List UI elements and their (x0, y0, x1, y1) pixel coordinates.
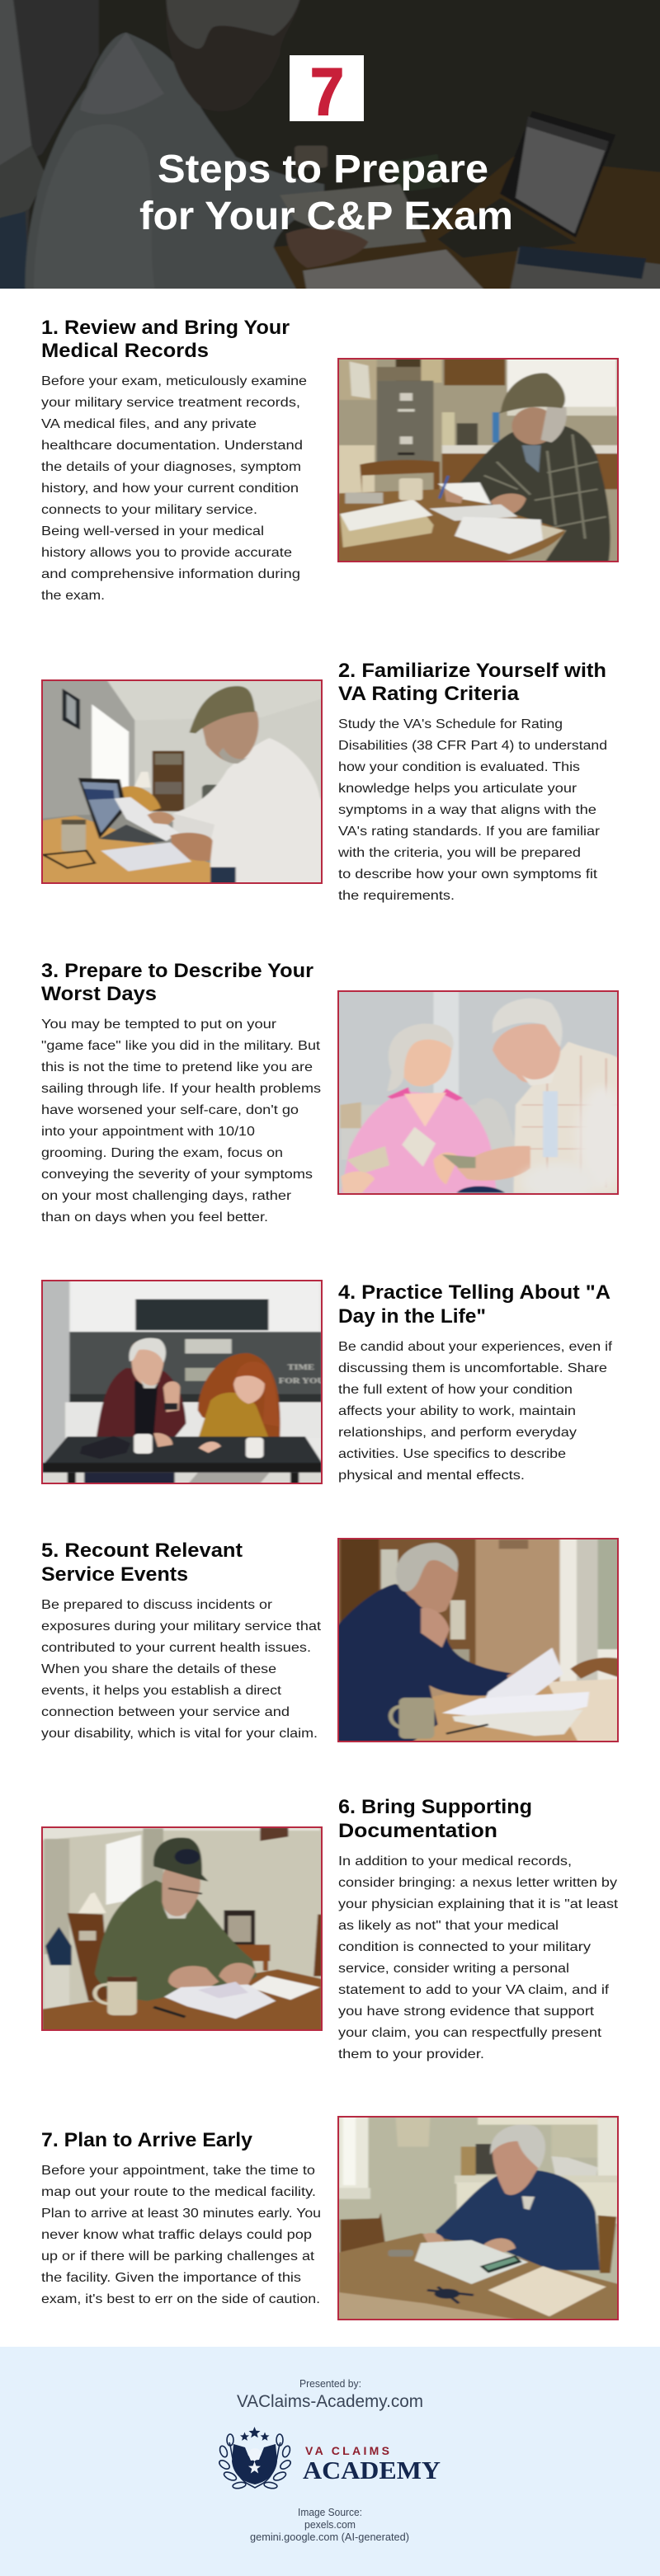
presented by text (237, 2378, 423, 2411)
heading: step 1: Medical Records (41, 340, 209, 362)
text block: step 5 body: connection between your service and (41, 1705, 290, 1719)
text block: step 4 body: activities. Use specifics to describe (338, 1447, 566, 1461)
text block: step 2 body (337, 717, 607, 903)
text block: step 2 body: with the criteria, you will be prepared (337, 846, 581, 860)
text block: step 6 body: statement to add to your VA claim, and if (338, 1983, 610, 1997)
photo: man and woman talking at kitchen table (38, 1278, 328, 1488)
text block: step 3 body (41, 1018, 321, 1225)
title (139, 148, 513, 238)
text block: step 5 body (41, 1598, 322, 1741)
panel: step 2 (35, 660, 607, 903)
panel: step 5 (41, 1535, 627, 1747)
photo: veteran in white sweater with laptop (35, 676, 331, 888)
text block: step 3 body: into your appointment with 10/10 (41, 1125, 255, 1139)
photo: veteran in plaid shirt reviewing records (332, 355, 627, 566)
text block: step 2 body: knowledge helps you articulate your (338, 782, 578, 796)
text block: step 4 body (338, 1340, 613, 1483)
text block: step 1 body: history, and how your current condition (41, 482, 299, 496)
text block: step 3 body: than on days when you feel better. (41, 1210, 268, 1225)
panel: step 3 (41, 960, 627, 1225)
text block: step 5 body: exposures during your military service that (41, 1619, 322, 1634)
icon: eagle crest with laurels and stars (218, 2427, 292, 2489)
presented by text: VAClaims-Academy.com (237, 2392, 423, 2411)
text block: step 4 body: discussing them is uncomfortable. Share (338, 1361, 607, 1375)
logo wordmark: VA CLAIMS (305, 2444, 389, 2457)
heading: step 2: VA Rating Criteria (338, 683, 520, 705)
photo: veteran in olive shirt with documents (35, 1824, 326, 2035)
text block: step 5 body: events, it helps you establish a direct (41, 1684, 282, 1698)
heading: step 1: 1. Review and Bring Your (41, 317, 290, 339)
text block: step 7 body (41, 2164, 321, 2306)
text block: step 5 body: contributed to your current health issues. (41, 1641, 311, 1655)
image source credits: gemini.google.com (AI-generated) (250, 2531, 409, 2543)
text block: step 6 body: In addition to your medical records, (338, 1854, 572, 1869)
logo wordmark (303, 2444, 441, 2484)
text block: step 1 body: connects to your military service. (41, 503, 257, 517)
text block: step 4 body: relationships, and perform everyday (338, 1426, 577, 1440)
text block: step 1 body: Being well-versed in your medical (41, 524, 264, 538)
title: for Your C&P Exam (139, 195, 513, 238)
text block: step 3 body: grooming. During the exam, focus on (41, 1146, 283, 1160)
text block: step 3 body: have worsened your self-care, don't go (41, 1103, 299, 1117)
panel: footer (0, 2347, 660, 2576)
photo: older couple looking at papers (332, 987, 627, 1201)
text block: step 1 body: your military service treatment records, (41, 396, 300, 410)
text block: step 3 body: this is not the time to pretend like you are (41, 1060, 313, 1074)
heading: step 3: 3. Prepare to Describe Your (41, 960, 314, 982)
image source credits: Image Source: (298, 2507, 362, 2518)
text block: step 2 body: Disabilities (38 CFR Part 4) to understand (338, 739, 607, 753)
text block: step 1 body (41, 374, 307, 603)
text block: step 4 body: the full extent of how your condition (338, 1383, 573, 1397)
text block: step 6 body: your claim, you can respectfully present (338, 2026, 602, 2040)
text block: step 5 body: When you share the details of these (41, 1662, 276, 1676)
text block: step 1 body: VA medical files, and any private (41, 417, 257, 431)
heading: step 6 (338, 1796, 532, 1842)
panel: step 1 (41, 317, 627, 603)
heading: step 1 (41, 317, 290, 362)
text block: step 3 body: "game face" like you did in the military. But (41, 1039, 321, 1053)
text block: step 1 body: the details of your diagnoses, symptom (41, 460, 301, 474)
panel: hero header (0, 0, 660, 297)
text block: step 5 body: your disability, which is vital for your claim. (41, 1727, 318, 1741)
text block: step 1 body: and comprehensive information during (41, 567, 300, 581)
title: Steps to Prepare (158, 148, 488, 191)
text block: step 2 body: VA's rating standards. If you are familiar (338, 825, 601, 839)
text block: step 7 body: Plan to arrive at least 30 minutes early. You (41, 2207, 321, 2221)
heading: step 5 (41, 1539, 243, 1586)
text block: step 6 body: as likely as not" that your medical (338, 1919, 559, 1933)
presented by text: Presented by: (299, 2378, 361, 2390)
text block: step 3 body: conveying the severity of your symptoms (41, 1168, 313, 1182)
heading: step 4 (338, 1281, 610, 1328)
photo: man and woman talking at kitchen table: FOR YOU (279, 1377, 324, 1385)
panel: step 4 (38, 1278, 613, 1488)
text block: step 6 body: consider bringing: a nexus letter written by (338, 1876, 617, 1890)
text block: step 2 body: Study the VA's Schedule for Rating (338, 717, 563, 731)
text block: step 5 body: Be prepared to discuss incidents or (41, 1598, 273, 1612)
text block: step 6 body (338, 1854, 619, 2061)
heading: step 4: 4. Practice Telling About "A (338, 1281, 610, 1304)
heading: step 4: Day in the Life" (338, 1305, 486, 1328)
text block: step 3 body: on your most challenging days, rather (41, 1189, 292, 1203)
text block: step 1 body: history allows you to provide accurate (41, 546, 292, 560)
heading: step 5: Service Events (41, 1563, 188, 1586)
text block: step 2 body: how your condition is evaluated. This (338, 760, 580, 774)
photo: man in navy shirt reading a letter (332, 1535, 627, 1747)
text block: step 1 body: Before your exam, meticulously examine (41, 374, 307, 388)
image source credits (250, 2507, 409, 2543)
panel: step 6 (35, 1796, 619, 2061)
text block: step 2 body: symptoms in a way that aligns with the (338, 803, 596, 817)
text block: step 6 body: your physician explaining that it is "at least (338, 1897, 619, 1911)
text block: step 7 body: exam, it's best to err on the side of caution. (41, 2292, 320, 2306)
text block: step 4 body: physical and mental effects. (338, 1469, 525, 1483)
text block: step 6 body: service, consider writing a personal (338, 1962, 569, 1976)
text block: step 7 body: never know what traffic delays could pop (41, 2228, 312, 2242)
text block: step 3 body: You may be tempted to put on your (41, 1018, 277, 1032)
text block: step 3 body: sailing through life. If your health problems (41, 1082, 321, 1096)
text block: step 7 body: map out your route to the medical facility. (41, 2185, 316, 2199)
text block: step 4 body: affects your ability to work, maintain (338, 1404, 576, 1418)
text block: step 6 body: condition is connected to your military (338, 1940, 591, 1954)
text block: step 6 body: you have strong evidence that support (338, 2005, 595, 2019)
heading: step 3: Worst Days (41, 983, 157, 1005)
heading: step 3 (41, 960, 314, 1005)
heading: step 2: 2. Familiarize Yourself with (338, 660, 606, 682)
heading: step 6: 6. Bring Supporting (338, 1796, 532, 1818)
photo: man in navy jacket studying a map (332, 2113, 627, 2325)
heading: step 5: 5. Recount Relevant (41, 1539, 243, 1562)
heading: step 2 (338, 660, 606, 705)
text block: step 1 body: the exam. (41, 589, 105, 603)
text block: step 7 body: Before your appointment, take the time to (41, 2164, 315, 2178)
text block: step 1 body: healthcare documentation. Understand (41, 439, 303, 453)
hero photo: man studying at table with laptop (0, 0, 660, 297)
text block: step 2 body: to describe how your own symptoms fit (338, 867, 598, 881)
heading: step 7: 7. Plan to Arrive Early (41, 2129, 253, 2151)
text block: step 7 body: the facility. Given the importance of this (41, 2271, 301, 2285)
image source credits: pexels.com (304, 2519, 356, 2531)
text block: step 4 body: Be candid about your experiences, even if (338, 1340, 613, 1354)
photo: man and woman talking at kitchen table: TIME (287, 1363, 314, 1371)
logo wordmark: ACADEMY (303, 2456, 441, 2484)
text block: step 7 body: up or if there will be parking challenges at (41, 2249, 315, 2263)
heading: step 6: Documentation (338, 1820, 497, 1842)
number badge: 7: 7 (310, 55, 344, 129)
text block: step 2 body: the requirements. (338, 889, 455, 903)
panel: step 7 (41, 2113, 627, 2325)
number badge: 7 (290, 55, 364, 129)
logo: VA Claims Academy (218, 2427, 441, 2489)
text block: step 6 body: them to your provider. (338, 2047, 484, 2061)
